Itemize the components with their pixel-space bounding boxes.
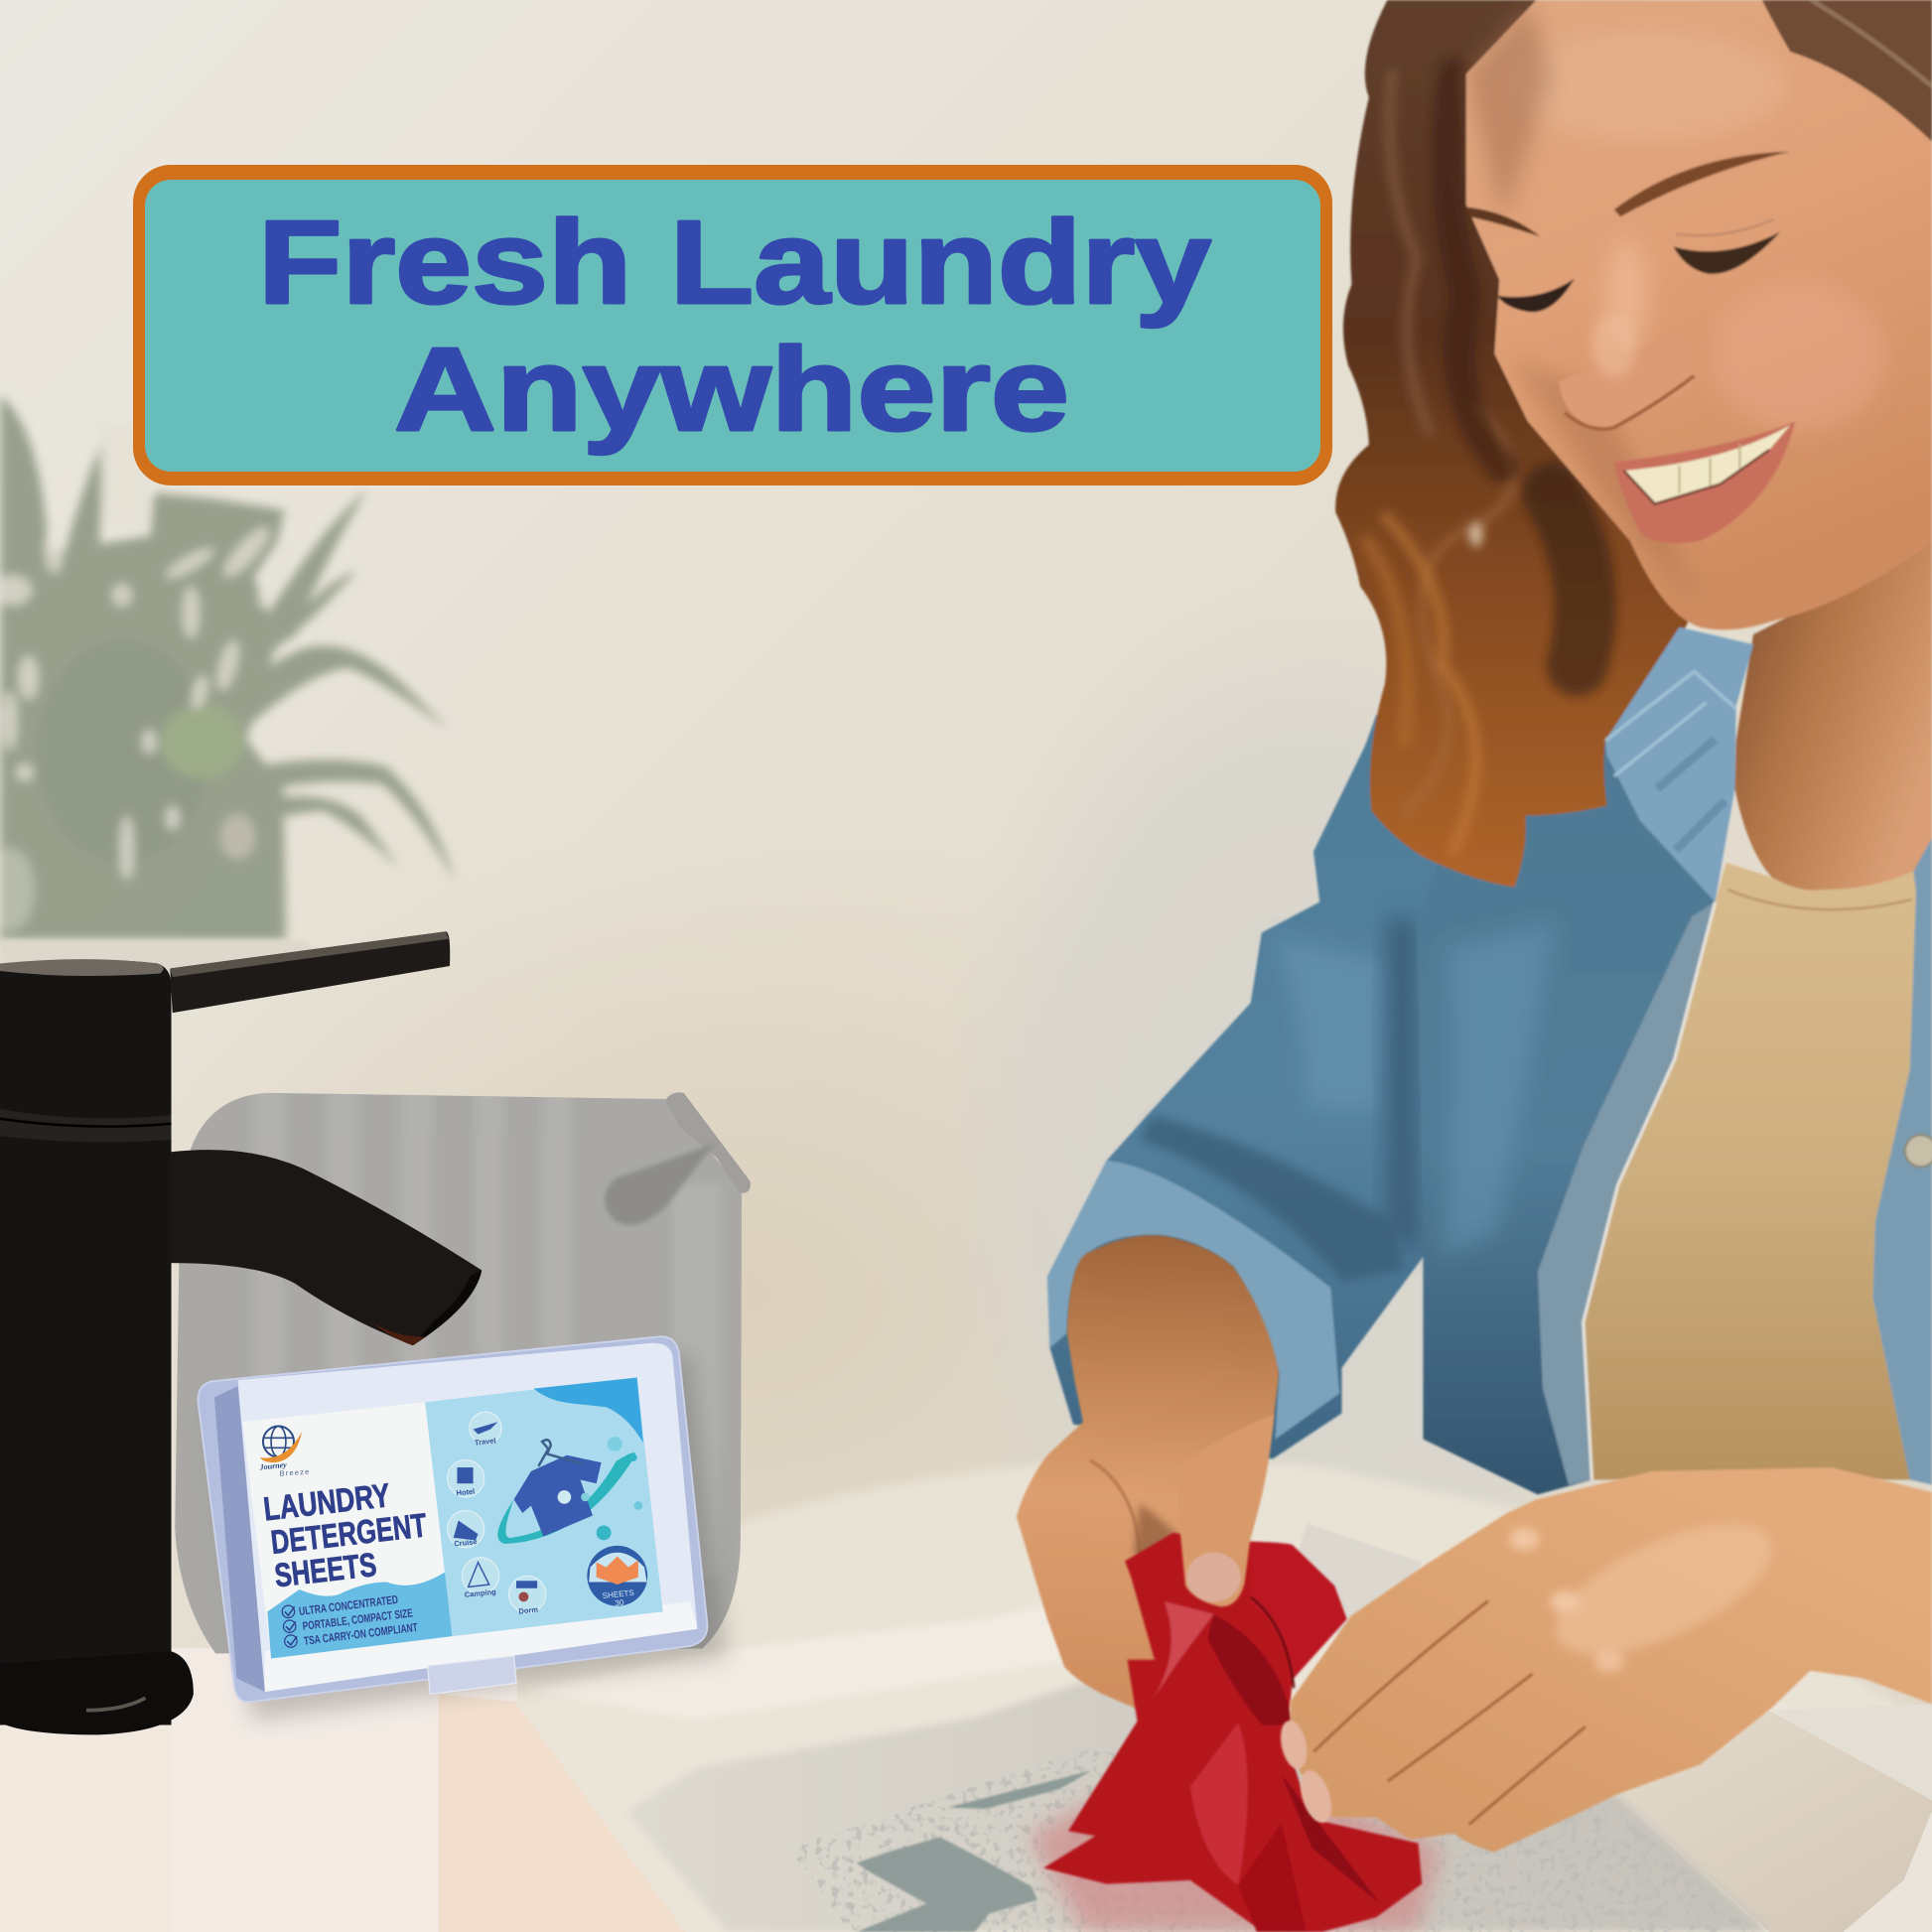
- use-case icons: Cruise: [454, 1537, 478, 1549]
- box case: [198, 1336, 707, 1702]
- tan t-shirt: [1584, 863, 1916, 1480]
- blurred plant: [0, 395, 456, 940]
- shelf behind faucet: [0, 940, 345, 973]
- peach counter strip: [439, 1694, 685, 1932]
- eyes: [1673, 231, 1780, 274]
- left hand and forearm: [1017, 1235, 1279, 1709]
- use-case icons: Dorm: [518, 1605, 539, 1616]
- label wave: [267, 1573, 452, 1658]
- denim collar: [1605, 627, 1753, 901]
- thumb over cloth: [1176, 1415, 1274, 1606]
- product benefits: TSA CARRY-ON COMPLIANT: [303, 1621, 419, 1648]
- sheets badge: [587, 1546, 647, 1608]
- sleeve folds: [1140, 918, 1420, 1282]
- sink basin: [515, 1523, 1932, 1932]
- smile: [1614, 421, 1795, 543]
- finger nails: [1277, 1718, 1311, 1771]
- right hand: [1277, 1467, 1932, 1852]
- pad fin: [665, 1092, 751, 1193]
- product benefits: ULTRA CONCENTRATED: [298, 1593, 399, 1618]
- product box: [198, 1336, 727, 1721]
- use-case icons: Hotel: [456, 1486, 476, 1497]
- soapy pink halo: [1029, 1787, 1442, 1932]
- woman: [1047, 0, 1932, 1494]
- rolled cuff: [1047, 1161, 1339, 1440]
- jacket placket: [1538, 901, 1716, 1484]
- red cloth: [1043, 1533, 1422, 1932]
- headline banner: [133, 165, 1332, 485]
- label blue panel: [425, 1378, 663, 1636]
- neck: [1734, 542, 1932, 891]
- hair: [1335, 0, 1688, 888]
- product benefits: PORTABLE, COMPACT SIZE: [302, 1606, 414, 1633]
- cheek and nose shading: [1466, 0, 1885, 604]
- nose: [1559, 313, 1695, 430]
- use-case icons: Camping: [464, 1587, 496, 1599]
- sink back rim: [1282, 1523, 1422, 1651]
- headline text: [258, 197, 1211, 456]
- logo: Breeze: [279, 1467, 311, 1478]
- black faucet: [0, 931, 482, 1734]
- banner frame: [133, 165, 1332, 485]
- sheets badge: SHEETS: [602, 1588, 634, 1600]
- face: [1466, 0, 1932, 629]
- soapy water: [627, 1682, 1769, 1932]
- back of counter: [0, 1460, 1932, 1932]
- right jacket front: [1872, 826, 1932, 1484]
- box shadow: [209, 1355, 727, 1721]
- product name: DETERGENT: [269, 1507, 429, 1562]
- headline text: Anywhere: [394, 324, 1069, 456]
- sheets badge: 30: [615, 1598, 624, 1608]
- logo: Journey: [258, 1460, 288, 1472]
- silicone pad: [175, 1084, 751, 1654]
- sink inner wall: [1540, 1712, 1932, 1932]
- headline text: Fresh Laundry: [258, 197, 1211, 329]
- banner fill: [145, 180, 1320, 472]
- plant light gaps: [0, 425, 302, 931]
- logo: [258, 1427, 311, 1478]
- water patches: [857, 1837, 1037, 1932]
- product name: LAUNDRY: [262, 1477, 392, 1528]
- box clasp: [428, 1656, 516, 1694]
- product name: [262, 1477, 429, 1594]
- left counter top: [0, 1649, 517, 1932]
- shirt on hanger: [497, 1437, 642, 1544]
- eyebrows: [1614, 152, 1790, 216]
- sheet stack: [238, 1343, 697, 1692]
- finger creases: [1314, 1601, 1585, 1824]
- label white panel: [242, 1402, 452, 1658]
- use-case icons: [448, 1412, 546, 1616]
- use-case icons: Travel: [475, 1436, 496, 1448]
- product name: SHEETS: [273, 1547, 378, 1594]
- jacket body: [1417, 727, 1716, 1494]
- top right hair: [1762, 0, 1932, 142]
- product benefits: [282, 1593, 419, 1648]
- plant foliage: [0, 395, 456, 940]
- denim sleeve: [1047, 715, 1601, 1458]
